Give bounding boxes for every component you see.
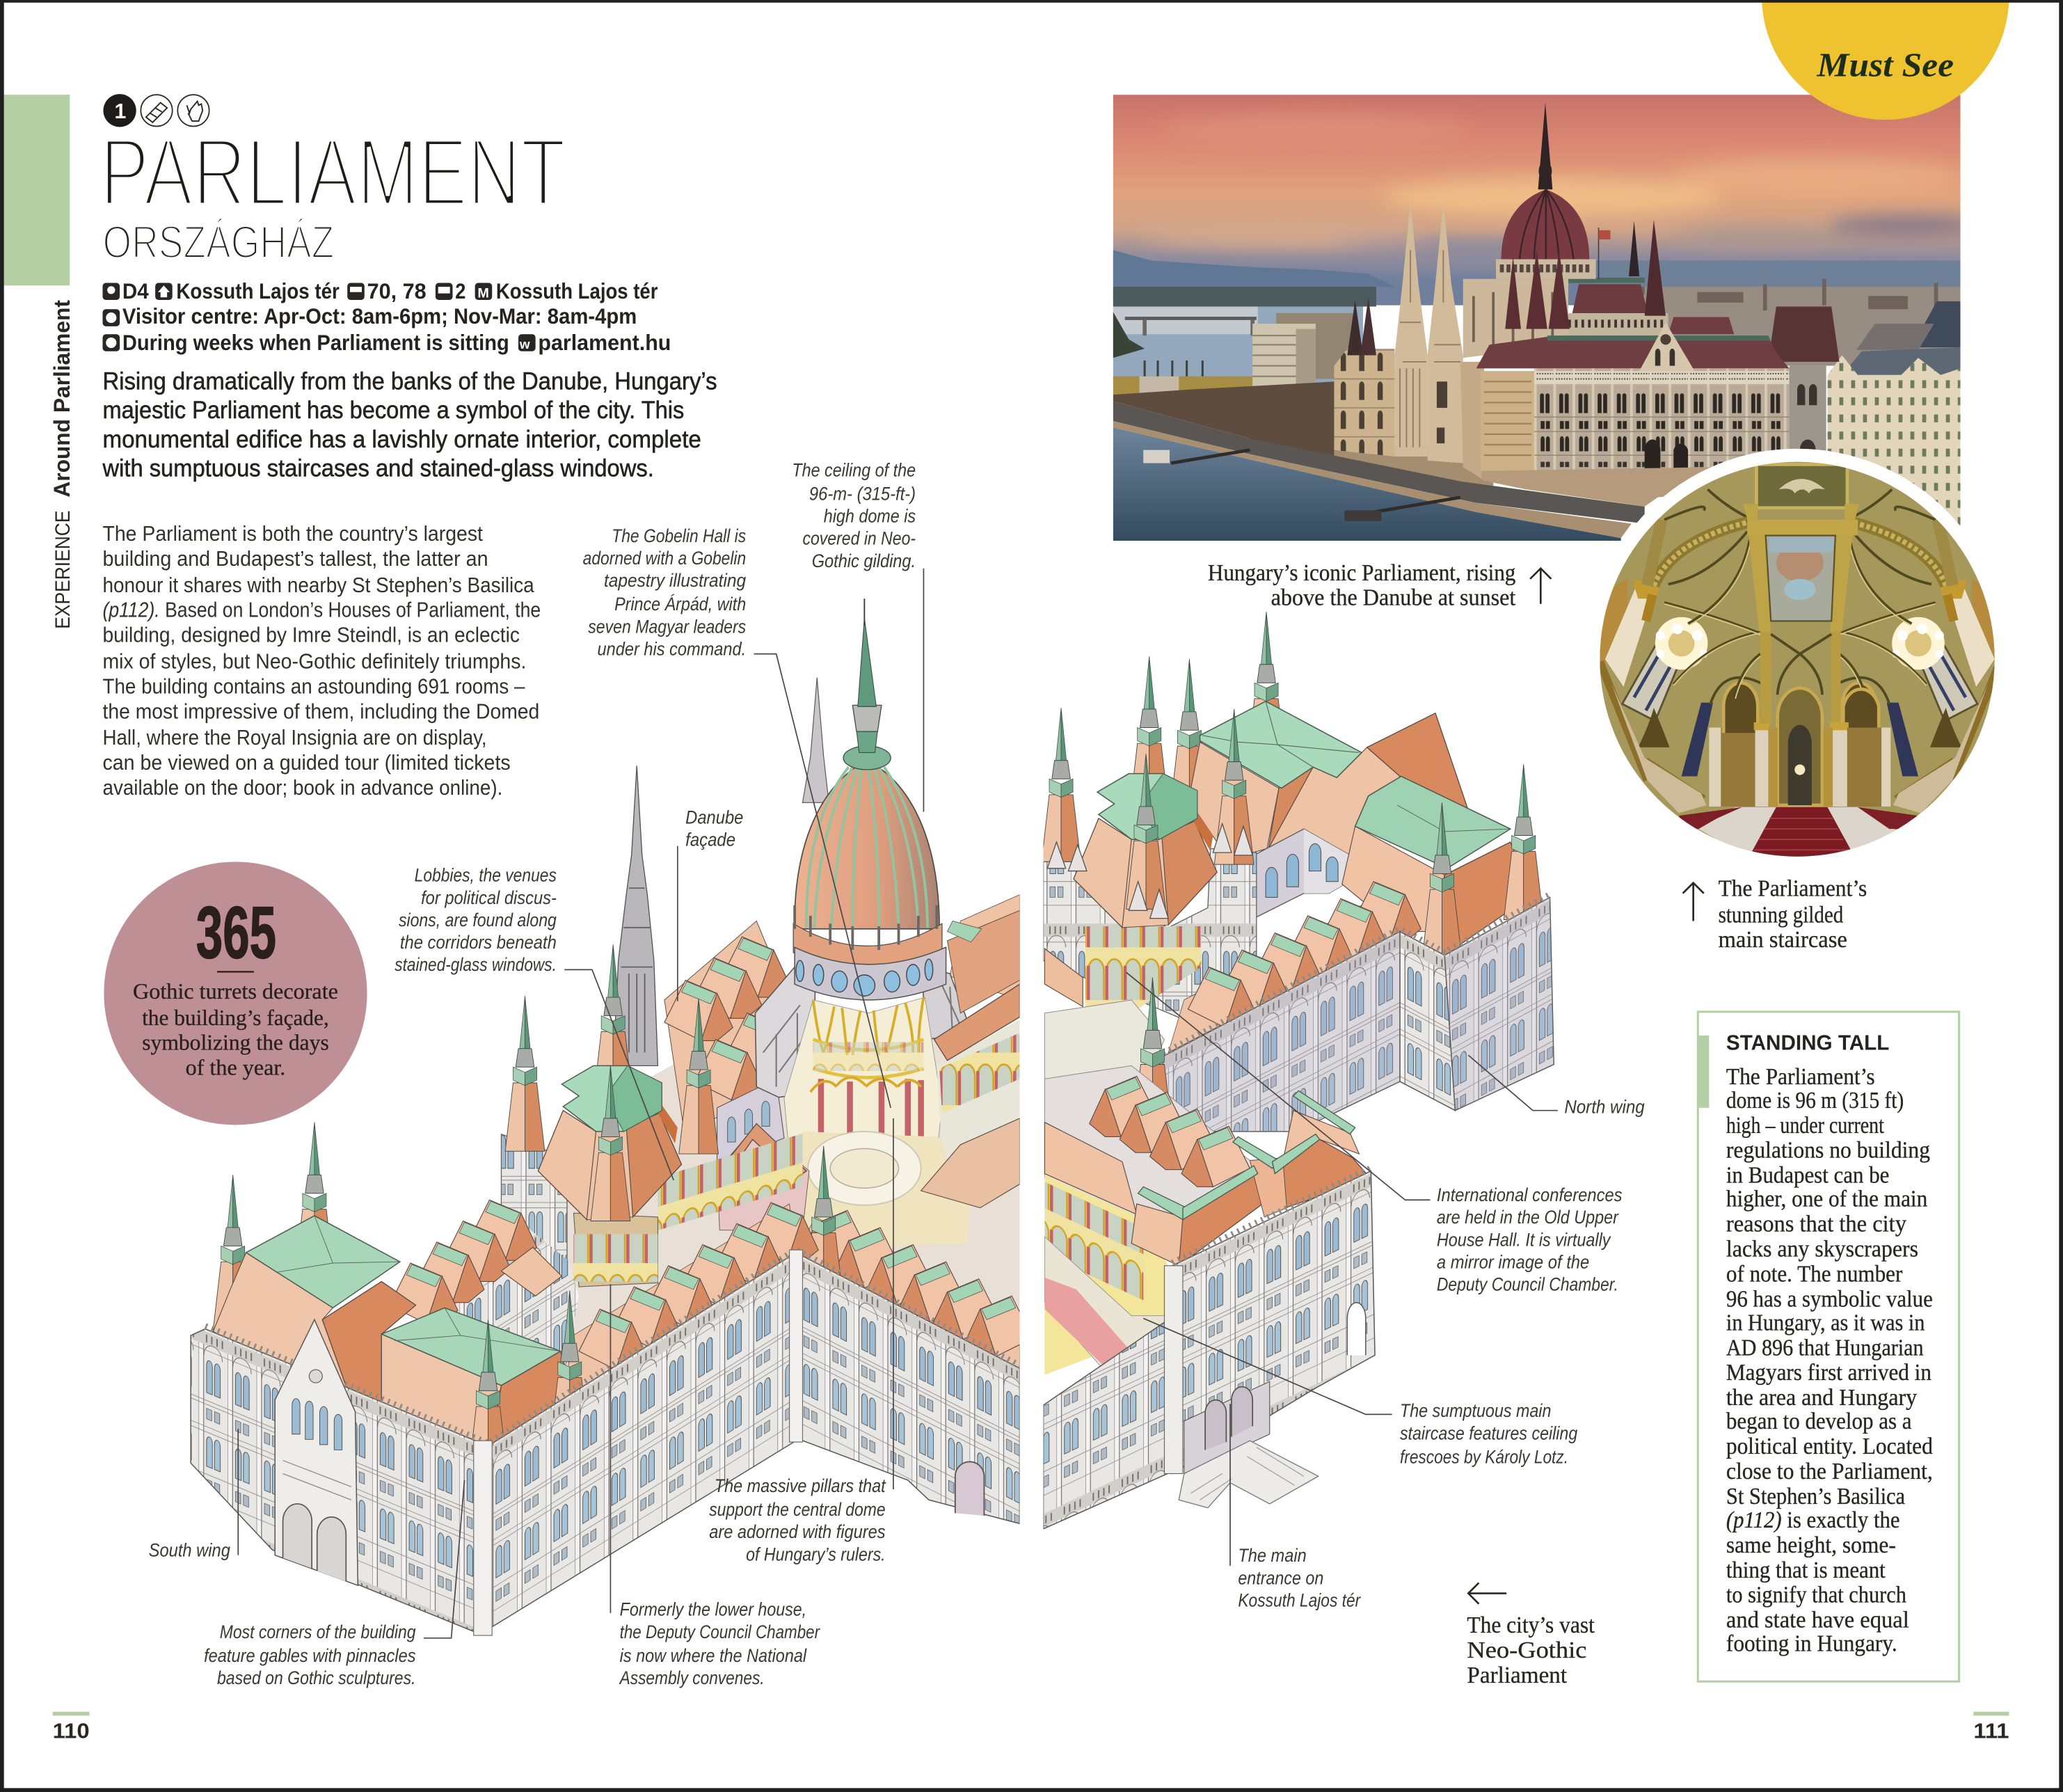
panel: Standing Tall sidebar: footing in Hungary. — [1726, 1631, 1897, 1657]
callout: Danube façade — [685, 807, 743, 850]
main spire — [613, 766, 658, 1065]
callout: conferences: International conferences — [1437, 1184, 1623, 1205]
rosette band — [795, 947, 946, 1000]
callout: Gobelin Hall — [583, 525, 746, 660]
body text: The Parliament is both the country’s largest — [102, 523, 484, 546]
callout: lower house — [619, 1599, 820, 1688]
façades — [191, 1253, 1019, 1634]
green strip lower — [1547, 335, 1771, 341]
left cut roofs — [1044, 949, 1083, 1006]
body text: building, designed by Imre Steindl, is an eclectic — [102, 624, 520, 647]
dome spire — [1538, 102, 1552, 189]
dome — [1502, 189, 1589, 259]
subtitle: ORSZÁGHÁZ — [102, 217, 334, 269]
far right roofs — [950, 895, 1019, 1000]
callout: corners: based on Gothic sculptures. — [217, 1667, 416, 1688]
yellow interior — [1085, 926, 1201, 1013]
illustration: south half of Parliament — [191, 598, 1033, 1635]
callout: staircase: The sumptuous main — [1400, 1400, 1551, 1421]
panel: Standing Tall sidebar: of note. The number — [1726, 1261, 1903, 1287]
back hall roofs — [1190, 701, 1468, 882]
back office — [1276, 313, 1355, 379]
spire tracery — [621, 888, 653, 1052]
panel: Standing Tall sidebar: Magyars first arrived in — [1726, 1360, 1931, 1386]
embankment stone — [1113, 421, 1632, 538]
red carpet centre — [1749, 807, 1855, 858]
intro text: majestic Parliament has become a symbol of the city. This — [102, 397, 684, 424]
arrow and caption: cross-section: Neo-Gothic — [1467, 1638, 1586, 1663]
panel: Standing Tall sidebar: political entity. Located — [1726, 1434, 1933, 1459]
panel: Standing Tall sidebar: higher, one of the main — [1726, 1187, 1927, 1212]
panel: Standing Tall sidebar: close to the Parliament, — [1726, 1459, 1933, 1484]
portal arches — [1645, 439, 1688, 471]
mirrored side halves — [1600, 489, 2000, 813]
intro text: Rising dramatically from the banks of the Danube, Hungary’s — [102, 368, 717, 395]
dome drum — [1496, 259, 1596, 279]
page number 111 — [1973, 1712, 2009, 1743]
panel: Standing Tall sidebar: The Parliament’s — [1726, 1064, 1875, 1090]
practical info: D4 — [122, 279, 149, 303]
office block — [1252, 324, 1316, 396]
callout: Gobelin Hall: seven Magyar leaders — [588, 616, 746, 637]
panel: Standing Tall sidebar: the area and Hungary — [1726, 1385, 1917, 1411]
twin towers — [1394, 201, 1463, 463]
panel: 365 turrets fact — [104, 862, 367, 1125]
gable entrance — [275, 1319, 358, 1585]
boat and pier — [1143, 450, 1460, 521]
panel: Standing Tall sidebar — [1697, 1012, 1959, 1681]
header icons: 1 — [115, 100, 126, 123]
callout: lobbies: Lobbies, the venues — [415, 865, 557, 886]
photo: staircase caption and arrow: Hungary’s iconic Parliament, rising — [1208, 560, 1515, 586]
wing towers — [468, 1291, 589, 1475]
callout: Gobelin Hall: under his command. — [597, 639, 746, 660]
grey end bay — [1790, 366, 1826, 466]
panel: Standing Tall sidebar: (p112) is exactly the — [1726, 1507, 1900, 1533]
callout: corners: feature gables with pinnacles — [204, 1645, 416, 1666]
main maroon lower roof — [1476, 337, 1790, 368]
grand staircase — [1044, 1237, 1164, 1379]
body text — [102, 523, 541, 800]
long peach roof — [1044, 1123, 1137, 1214]
body text: honour it shares with nearby St Stephen’s Basilica — [102, 574, 534, 597]
panel: Standing Tall sidebar: in Budapest can be — [1726, 1163, 1889, 1189]
lower eave pinnacles — [1172, 1168, 1371, 1263]
tower base terrace — [1334, 447, 1493, 489]
panel: Standing Tall sidebar: thing that is meant — [1726, 1557, 1886, 1583]
panel: Standing Tall sidebar: 96 has a symbolic value — [1726, 1286, 1933, 1312]
body text: building and Budapest’s tallest, the latter an — [102, 548, 488, 571]
crown band — [793, 923, 943, 964]
callout: staircase — [1400, 1400, 1577, 1467]
interior roof row before façade C — [800, 1210, 1033, 1356]
side gold bands — [1749, 535, 1771, 631]
lower dormer area — [1044, 1065, 1263, 1263]
panel: Standing Tall sidebar: lacks any skyscrapers — [1726, 1237, 1918, 1262]
white stairs — [1698, 807, 1776, 858]
callout: pillars: of Hungary’s rulers. — [746, 1544, 886, 1564]
panel: 365 turrets fact: the building’s façade, — [142, 1005, 329, 1030]
vertical section label: Around Parliament — [49, 300, 74, 498]
leader lines — [238, 569, 1558, 1638]
callout: Gobelin Hall: adorned with a Gobelin — [583, 548, 746, 569]
dome group — [755, 598, 967, 1097]
photo: staircase caption and arrow — [1208, 560, 1551, 611]
callout: corners: Most corners of the building — [220, 1621, 416, 1642]
practical info — [102, 279, 671, 355]
vertical section label: EXPERIENCE — [51, 511, 74, 629]
body text: (p112). Based on London’s Houses of Parliament, the — [102, 599, 541, 622]
panel: Standing Tall sidebar: same height, some- — [1726, 1532, 1896, 1558]
clouds — [1145, 116, 1986, 259]
callout: lower house: Formerly the lower house, — [620, 1599, 806, 1620]
rear south towers — [213, 1123, 334, 1330]
panel: 365 turrets fact: symbolizing the days — [142, 1030, 329, 1055]
distant haze — [1596, 260, 1961, 287]
callout: dome ceiling: 96-m- (315-ft-) — [809, 483, 916, 504]
distant city — [1596, 287, 1961, 366]
dormers behind dome — [664, 937, 795, 1100]
callout: lobbies: the corridors beneath — [400, 932, 557, 953]
arches — [1843, 689, 1879, 733]
callout: main entrance: entrance on — [1238, 1567, 1323, 1588]
right cream buildings — [1828, 355, 1961, 526]
front right spire towers — [1126, 709, 1254, 909]
hills — [1113, 250, 1394, 287]
large roofs behind dome — [664, 920, 768, 1122]
page number 110 — [53, 1712, 90, 1743]
callout: conferences: Deputy Council Chamber. — [1437, 1274, 1618, 1295]
callout: lobbies: sions, are found along — [399, 910, 557, 930]
callout: lobbies — [395, 865, 557, 975]
water — [1113, 427, 1621, 541]
vertical section label — [49, 300, 74, 629]
gothic pinnacles at roof foot — [1047, 824, 1252, 919]
callout: pillars: support the central dome — [709, 1499, 886, 1520]
callout: Gobelin Hall: tapestry illustrating — [604, 570, 746, 591]
far bridge — [1125, 317, 1257, 319]
arrow and caption: staircase: main staircase — [1719, 927, 1847, 953]
lower wing — [1131, 1091, 1371, 1266]
practical info: 70, 78 — [367, 279, 427, 303]
right arch pillars — [1833, 728, 1847, 807]
callout: Danube façade: Danube — [685, 807, 743, 828]
body text: the most impressive of them, including the Domed — [102, 700, 539, 723]
lilac wall with windows — [1257, 829, 1350, 917]
practical info: 2 — [455, 279, 465, 303]
practical info: During weeks when Parliament is sitting — [122, 331, 509, 355]
header icons — [103, 94, 209, 127]
body text: can be viewed on a guided tour (limited tickets — [102, 752, 511, 775]
yellow Must See badge: Must See — [1816, 46, 1954, 84]
illustration: north half of Parliament — [1042, 612, 1554, 1529]
practical info: Kossuth Lajos tér — [176, 279, 340, 303]
white tower block — [501, 1133, 568, 1260]
eave pinnacles — [205, 1250, 1019, 1443]
yellow staircase hall — [1044, 1175, 1171, 1375]
wall of south court — [413, 1217, 579, 1368]
intro text: monumental edifice has a lavishly ornate interior, complete — [102, 426, 701, 453]
slate roofs — [1912, 301, 1961, 347]
panel: 365 turrets fact: of the year. — [186, 1055, 285, 1080]
right small spires — [1629, 221, 1639, 276]
lantern and spire — [843, 746, 891, 770]
callout: conferences: a mirror image of the — [1437, 1252, 1589, 1273]
callout: pillars: are adorned with figures — [709, 1521, 886, 1542]
photo: staircase caption and arrow: above the Danube at sunset — [1271, 585, 1516, 611]
small court roof — [501, 1247, 561, 1296]
callout: staircase: staircase features ceiling — [1400, 1422, 1577, 1443]
intro text: with sumptuous staircases and stained-glass windows. — [102, 454, 654, 482]
façade row dormers — [579, 1203, 818, 1370]
panel: Standing Tall sidebar: AD 896 that Hungarian — [1726, 1335, 1924, 1361]
north wing towers — [1422, 764, 1543, 958]
arrow and caption: staircase: The Parliament’s — [1719, 876, 1867, 901]
dome shell — [795, 761, 939, 929]
body text: The building contains an astounding 691 rooms – — [102, 675, 525, 698]
panel: Standing Tall sidebar: and state have equal — [1726, 1608, 1909, 1633]
callout: Gobelin Hall: Prince Árpád, with — [614, 594, 746, 614]
lamps and yellow bridge — [1113, 376, 1258, 395]
callout: Danube façade: façade — [685, 830, 735, 850]
rear right maroon — [1668, 317, 1734, 334]
arrow and caption: cross-section — [1467, 1583, 1595, 1688]
central gable — [1639, 322, 1695, 371]
mid wall — [1460, 362, 1484, 480]
north façades — [1158, 897, 1554, 1132]
sky — [1113, 95, 1961, 306]
roof strip above north façade — [1168, 895, 1400, 1052]
photo: Parliament at sunset — [1113, 95, 1986, 541]
gold cross band — [1747, 520, 1858, 535]
lower vault fans — [1771, 634, 1831, 695]
interior yellow chamber — [573, 1213, 658, 1287]
north wing roofs — [1342, 776, 1533, 956]
callout: staircase: frescoes by Károly Lotz. — [1400, 1446, 1568, 1467]
lilac wall with windows — [717, 1088, 785, 1159]
central tower roof — [538, 1065, 682, 1220]
callout: conferences: House Hall. It is virtually — [1437, 1229, 1611, 1250]
mosaic floor — [801, 1132, 970, 1246]
callout: main entrance: Kossuth Lajos tér — [1238, 1589, 1361, 1610]
main entrance arches — [1184, 1381, 1270, 1473]
parliament left wing — [1334, 349, 1394, 457]
green roof strip — [1566, 278, 1645, 283]
tree line — [1113, 287, 1376, 307]
tower behind central roof — [594, 944, 633, 1100]
upper white tracery — [1566, 313, 1668, 337]
callout: dome ceiling: The ceiling of the — [792, 459, 916, 480]
panel: Standing Tall sidebar: to signify that church — [1726, 1583, 1906, 1608]
practical info: Kossuth Lajos tér — [496, 279, 658, 303]
body text: mix of styles, but Neo-Gothic definitely triumphs. — [102, 650, 526, 673]
arrow and caption: cross-section: The city’s vast — [1467, 1612, 1595, 1638]
body text: available on the door; book in advance online). — [102, 777, 502, 800]
panel: Standing Tall sidebar: high – under current — [1726, 1113, 1884, 1139]
green cross right — [1097, 774, 1197, 839]
callout: pillars: The massive pillars that — [715, 1475, 886, 1496]
callout: lobbies: stained-glass windows. — [395, 954, 557, 975]
dormer rows — [1188, 882, 1421, 1028]
upper back maroon roof — [1572, 284, 1648, 316]
central mid spires — [1505, 257, 1521, 329]
roof strip above façade C — [796, 1217, 1019, 1368]
plinth — [1481, 466, 1791, 507]
left island — [1113, 312, 1145, 358]
callout: Gobelin Hall: The Gobelin Hall is — [612, 525, 746, 546]
yellow Must See badge — [1762, 0, 2009, 120]
grey rear spire — [802, 678, 829, 802]
callout: dome ceiling: Gothic gilding. — [812, 550, 916, 571]
south wing roofs — [213, 1216, 579, 1446]
trees and bank — [1113, 381, 1339, 463]
centre gutter — [1019, 579, 1044, 1605]
inner tower spire — [1133, 978, 1172, 1133]
callout: dome ceiling — [792, 459, 916, 571]
photo: main staircase circle — [1586, 449, 2008, 870]
practical info: parlament.hu — [538, 331, 671, 355]
intro text — [102, 368, 717, 482]
arrow and caption: staircase — [1683, 876, 1867, 953]
roof strip above façade B — [566, 1204, 796, 1397]
red side carpets — [1679, 807, 1742, 829]
practical info: w — [519, 338, 530, 352]
golden bay — [1480, 371, 1534, 471]
arrow and caption: staircase: stunning gilded — [1719, 902, 1843, 928]
pinnacles on drum — [795, 905, 937, 950]
arrow and caption: cross-section: Parliament — [1467, 1663, 1568, 1688]
callout: corners — [204, 1621, 416, 1688]
panel: Standing Tall sidebar: began to develop as a — [1726, 1409, 1912, 1434]
small hall left of floor — [658, 1124, 809, 1230]
panel: 365 turrets fact: 365 — [196, 891, 276, 974]
body text: Hall, where the Royal Insignia are on display, — [102, 727, 487, 750]
practical info: Visitor centre: Apr-Oct: 8am-6pm; Nov-Mar: 8am-4pm — [122, 304, 637, 328]
central fresco — [1766, 535, 1835, 621]
callout: lower house: Assembly convenes. — [619, 1667, 765, 1688]
top panel — [1756, 464, 1847, 508]
wing roofs back row — [390, 1200, 537, 1324]
green cross — [561, 1065, 662, 1132]
main façade — [1534, 368, 1791, 471]
corner pier — [474, 1441, 492, 1635]
left page section tab — [4, 95, 70, 285]
panel: Standing Tall sidebar: St Stephen’s Basilica — [1726, 1484, 1905, 1509]
callout: pillars — [709, 1475, 886, 1564]
page number 111: 111 — [1973, 1720, 2009, 1743]
panel: Standing Tall sidebar: STANDING TALL — [1726, 1032, 1889, 1055]
grey-white tower blocks — [1044, 848, 1257, 1020]
central right pyramid roof — [1074, 774, 1217, 928]
buttresses — [755, 960, 815, 1097]
callout: lower house: is now where the National — [620, 1645, 807, 1666]
panel: 365 turrets fact: Gothic turrets decorate — [133, 978, 338, 1004]
cutaway interior — [784, 997, 973, 1250]
vault background — [1600, 461, 1995, 858]
practical info: M — [477, 285, 489, 301]
right hall — [921, 910, 1019, 1208]
central block — [1463, 279, 1568, 358]
panel: Standing Tall sidebar: reasons that the city — [1726, 1212, 1906, 1237]
end arch — [955, 1461, 984, 1516]
stair towers and corner pier — [1164, 1266, 1183, 1473]
callout: conferences: are held in the Old Upper — [1437, 1207, 1619, 1228]
panel: Standing Tall sidebar: in Hungary, as it was in — [1726, 1310, 1925, 1335]
spire towers — [505, 996, 718, 1221]
callout: lobbies: for political discus- — [421, 887, 557, 908]
rear towers — [1042, 612, 1286, 863]
callout: conferences — [1437, 1184, 1623, 1295]
callout: main entrance: The main — [1238, 1545, 1307, 1566]
river far — [1113, 307, 1363, 386]
callout: lower house: the Deputy Council Chamber — [620, 1621, 820, 1642]
flag — [1598, 228, 1611, 279]
north eave pinnacles — [1158, 895, 1550, 1056]
road — [1113, 402, 1645, 523]
page number 110: 110 — [53, 1720, 90, 1743]
callout: North wing: North wing — [1564, 1096, 1645, 1117]
callout: dome ceiling: covered in Neo- — [802, 528, 916, 549]
left small dark spires — [1347, 300, 1363, 355]
callout: dome ceiling: high dome is — [824, 506, 916, 527]
back wall of central section — [552, 1038, 1020, 1366]
callout: main entrance — [1238, 1545, 1361, 1610]
callout: South wing: South wing — [149, 1540, 230, 1561]
end arch right — [1347, 1303, 1366, 1355]
entrance stairs — [1179, 1441, 1319, 1508]
lower façades — [1044, 1171, 1375, 1529]
panel: Standing Tall sidebar: regulations no building — [1726, 1138, 1930, 1164]
title: PARLIAMENT — [100, 119, 566, 226]
panel: Standing Tall sidebar: dome is 96 m (315 ft) — [1726, 1088, 1904, 1113]
